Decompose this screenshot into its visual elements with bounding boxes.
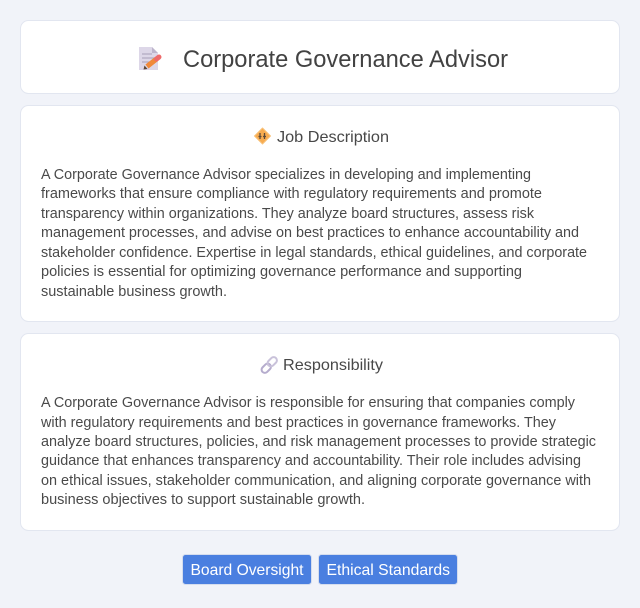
text block: responsibility: on ethical issues, stakeholder communication, and aligning corporate governance with bbox=[41, 473, 591, 489]
text block: job description: management processes, and advise on best practices to enhance accountability and bbox=[41, 225, 579, 241]
heading: job description: Job Description bbox=[277, 129, 389, 146]
text block: job description: frameworks that ensure compliance with regulatory requirements and promote bbox=[41, 186, 542, 202]
text block: job description: sustainable business growth. bbox=[41, 284, 227, 300]
panel: title card bbox=[20, 20, 620, 94]
text block: job description: transparency within organizations. They analyze board structures, assess risk bbox=[41, 206, 535, 222]
heading: responsibility: Responsibility bbox=[283, 357, 383, 374]
tag: board oversight: Board Oversight bbox=[190, 562, 304, 579]
text block: job description: A Corporate Governance Advisor specializes in developing and implementing bbox=[41, 167, 531, 183]
icon: document with pencil bbox=[139, 47, 159, 70]
panel: responsibility bbox=[20, 334, 620, 530]
text block: responsibility: with regulatory requirements and best practices in governance frameworks. They bbox=[40, 415, 557, 431]
text block: responsibility: analyze board structures, policies, and risk management processes to provide strategic bbox=[41, 434, 596, 450]
text block: responsibility: guidance that enhances transparency and accountability. Their role includes advising bbox=[41, 453, 581, 469]
text block: responsibility: A Corporate Governance Advisor is responsible for ensuring that companies comply bbox=[41, 395, 576, 411]
icon: chain link bbox=[260, 356, 278, 374]
icon: diamond sign bbox=[254, 128, 270, 144]
text block: job description: policies is essential for optimizing governance performance and supporting bbox=[41, 264, 522, 280]
text block: job description bbox=[41, 167, 587, 300]
title: Corporate Governance Advisor bbox=[183, 46, 508, 73]
tag: ethical standards bbox=[318, 554, 458, 584]
tag: board oversight bbox=[182, 554, 312, 584]
text block: job description: stakeholder confidence. Expertise in legal standards, ethical guidelines, and corporate bbox=[41, 245, 587, 261]
tag: ethical standards: Ethical Standards bbox=[326, 562, 450, 579]
panel: job description bbox=[20, 106, 620, 322]
text block: responsibility: business objectives to support sustainable growth. bbox=[41, 492, 365, 508]
text block: responsibility bbox=[40, 395, 596, 508]
